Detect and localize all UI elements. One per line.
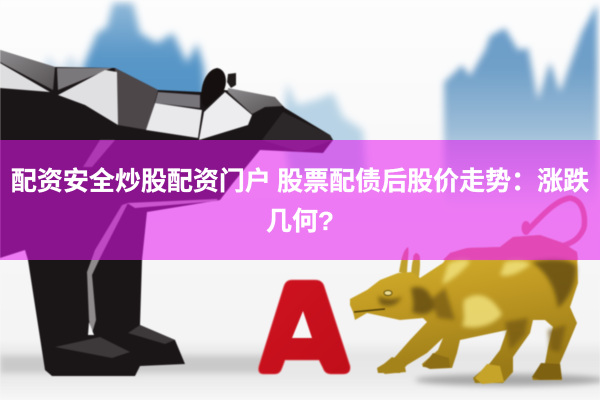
blurred stock chart middle (282, 83, 366, 175)
bear leg highlight (87, 203, 128, 333)
bear light facets (0, 63, 50, 92)
bull body (350, 235, 578, 383)
bull second hoof (423, 353, 450, 369)
golden bull figure (350, 198, 600, 386)
blurred stock chart right (444, 4, 598, 215)
letter A block (259, 280, 350, 374)
bull rear hoof (532, 363, 562, 380)
bear figure (0, 50, 333, 376)
bear ear (201, 68, 226, 107)
blurred chart left fringe (40, 55, 85, 120)
bull light highlight (442, 259, 530, 328)
bull dark shading (378, 259, 576, 352)
bear grey upper facets (0, 50, 55, 90)
bull eye (384, 290, 392, 296)
bear muzzle (262, 112, 333, 152)
bull horns (399, 247, 420, 285)
bull horn tips in band (402, 247, 420, 260)
letter A hole (292, 311, 312, 338)
bear hoof highlights (55, 337, 130, 358)
bull shadow (415, 374, 600, 386)
bull third hoof (475, 364, 504, 384)
bear small ear (227, 73, 236, 88)
magenta title band (0, 140, 600, 260)
gap between bear legs (88, 322, 94, 335)
bull tail (528, 198, 585, 245)
bull tail tuft (522, 221, 530, 235)
blurred stock chart left (83, 3, 206, 135)
title: 配资安全炒股配资门户 股票配债后股价走势：涨跌几何? (11, 166, 589, 236)
bear shoulder stripe highlight (83, 140, 115, 167)
bull pink rump in band (443, 235, 578, 260)
bear main body (0, 50, 333, 376)
bear belly lower stripe (127, 199, 218, 208)
bull front hoof (378, 357, 406, 374)
bull mouth (354, 309, 385, 312)
left floor shadow (0, 356, 270, 373)
